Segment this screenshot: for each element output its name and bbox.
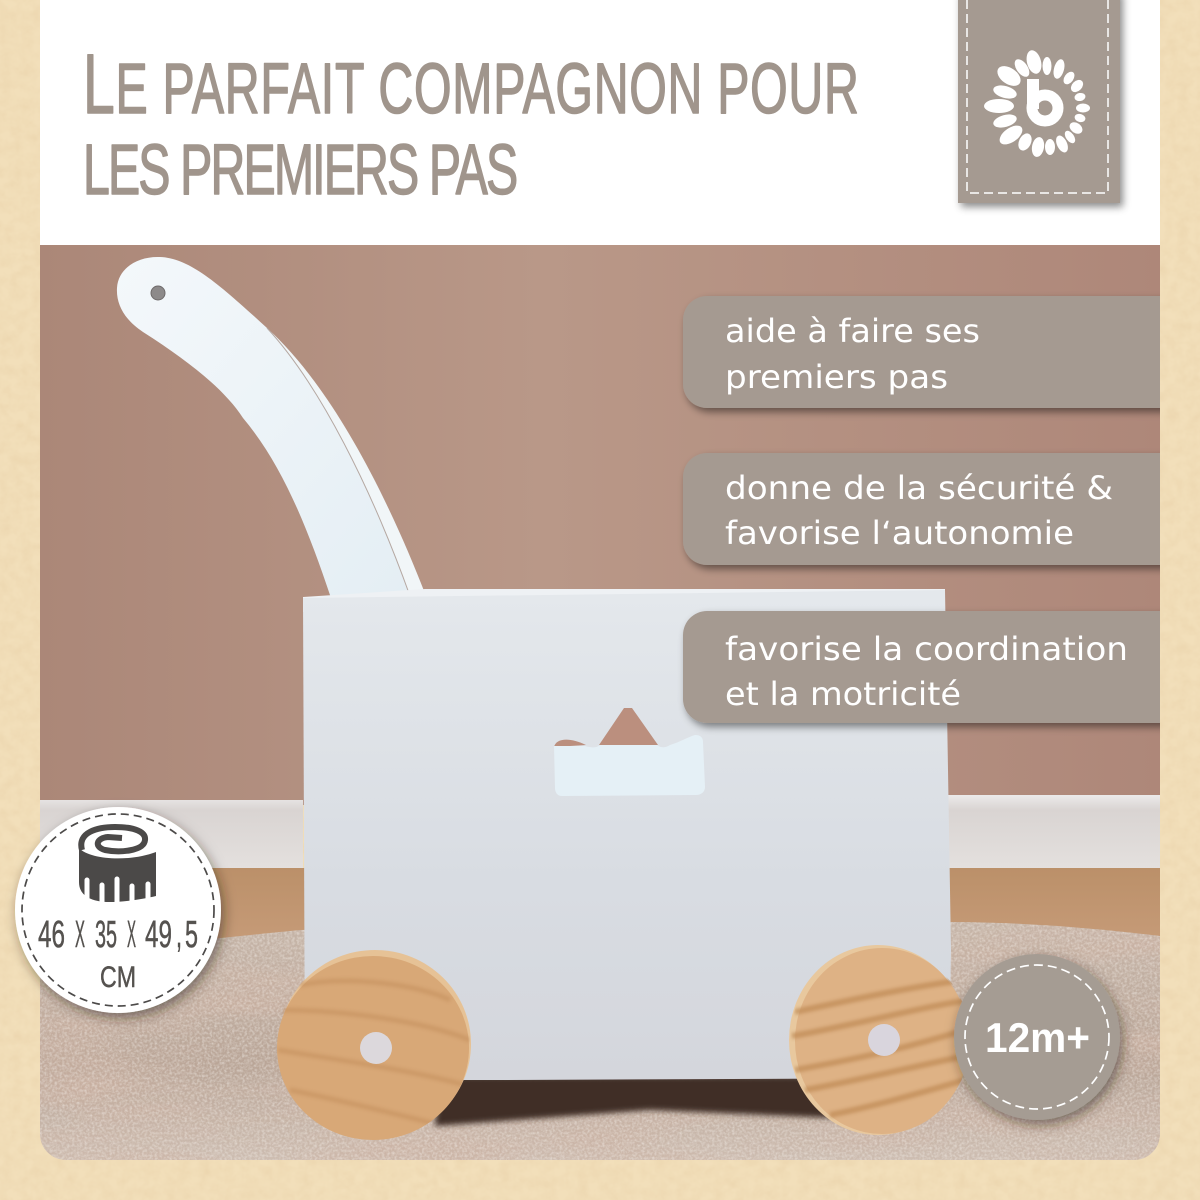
- left wheel: [277, 950, 471, 1140]
- title: LE PARFAIT COMPAGNON POUR: [83, 38, 859, 132]
- benefit pill 2: favorise l‘autonomie: [725, 514, 1074, 552]
- handle: [117, 257, 426, 598]
- dimensions text: ,: [176, 914, 182, 956]
- axle: [868, 1024, 900, 1056]
- hand cutout: [554, 708, 705, 796]
- screw: [151, 286, 165, 300]
- dimensions text: X: [127, 914, 136, 956]
- wood floor: [212, 868, 1160, 938]
- title: [83, 38, 859, 209]
- cart shadow: [435, 1076, 850, 1126]
- header panel: [40, 0, 1160, 246]
- benefit pill 1: aide à faire ses: [725, 312, 980, 350]
- benefit pill 1: premiers pas: [725, 358, 948, 396]
- baseboard: [40, 795, 1160, 870]
- axle: [360, 1032, 392, 1064]
- dimensions text: 35: [95, 914, 117, 956]
- dimensions text: 5: [185, 914, 198, 956]
- icon: measuring tape: [79, 827, 156, 906]
- age badge: [954, 954, 1120, 1120]
- benefit pill 2: donne de la sécurité &: [725, 469, 1113, 507]
- benefit pill 1: [683, 296, 1170, 408]
- box: [303, 589, 951, 1080]
- title: LES PREMIERS PAS: [83, 130, 518, 209]
- icon: sunflower logo: [984, 49, 1090, 158]
- dimensions badge: [15, 807, 221, 1013]
- dimensions text: 46: [38, 914, 65, 956]
- benefit pill 3: et la motricité: [725, 675, 961, 713]
- rug: [40, 920, 1160, 1160]
- dimensions text: [38, 914, 198, 994]
- wall: [40, 245, 1160, 805]
- benefit pill 2: [683, 453, 1170, 565]
- dimensions text: 49: [145, 914, 172, 956]
- walker cart: [117, 257, 970, 1140]
- benefit pill 3: favorise la coordination: [725, 630, 1128, 668]
- age badge: 12m+: [985, 1014, 1090, 1061]
- product photo: [40, 245, 1160, 1160]
- brand tag with logo: [958, 0, 1120, 203]
- dimensions text: X: [75, 914, 85, 956]
- dimensions text: CM: [100, 961, 136, 994]
- right wheel: [789, 945, 970, 1135]
- benefit pill 3: [683, 611, 1170, 723]
